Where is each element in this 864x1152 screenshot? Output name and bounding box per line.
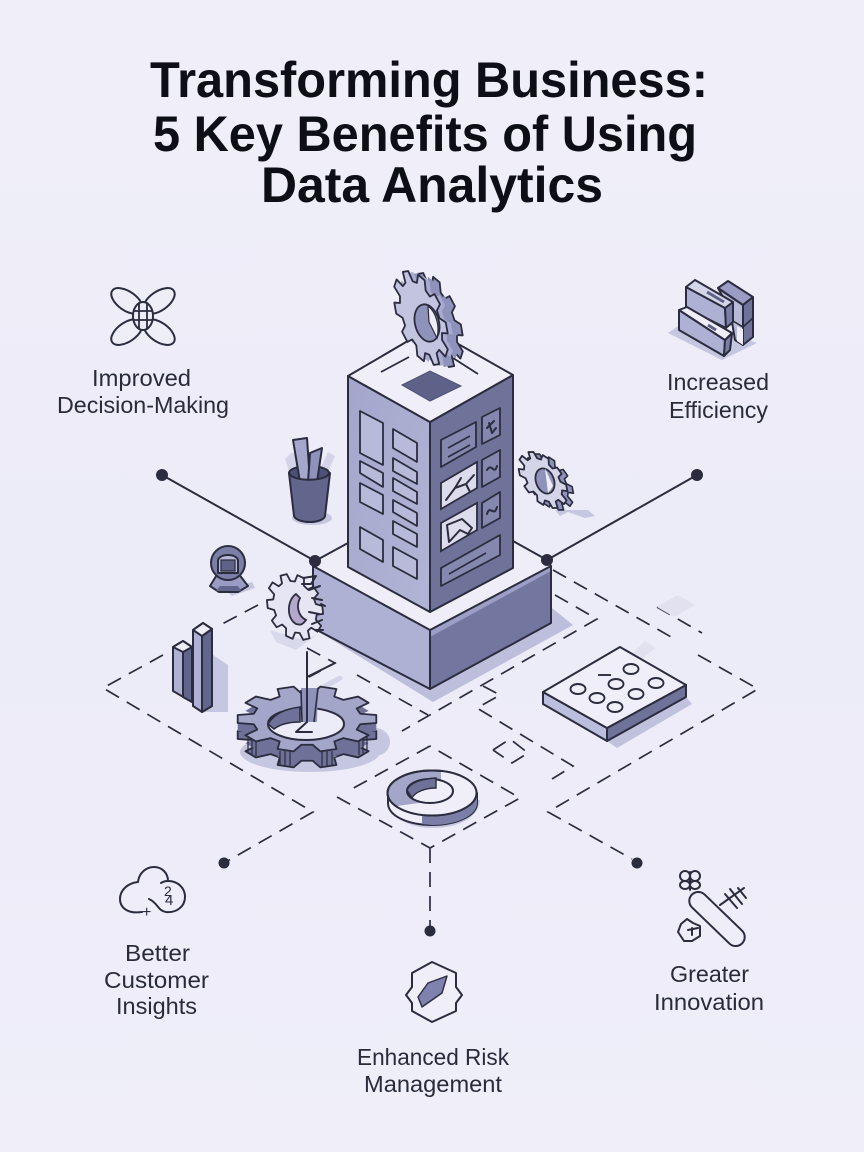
plinth	[313, 497, 551, 689]
icon: improved decision-making	[107, 283, 179, 350]
label: enhanced risk management: Management	[364, 1071, 503, 1097]
dashed connector network	[103, 570, 758, 930]
central tower on plinth	[313, 328, 573, 702]
label: improved decision-making: Decision-Making	[57, 392, 229, 418]
icon: better customer insights	[120, 867, 185, 921]
label: better customer insights: Better	[125, 940, 190, 966]
bar chart	[173, 623, 228, 712]
label: enhanced risk management	[357, 1044, 509, 1097]
tower left windows	[360, 411, 417, 579]
label: improved decision-making	[57, 365, 229, 418]
gear on top of tower	[387, 263, 470, 375]
icon: enhanced risk management	[406, 962, 462, 1022]
plinth corner dots	[309, 554, 553, 567]
flag on ground gear	[307, 652, 340, 713]
icon: greater innovation	[678, 871, 748, 950]
label: greater innovation: Innovation	[654, 989, 764, 1015]
label: improved decision-making: Improved	[92, 365, 191, 391]
webcam icon	[210, 546, 255, 596]
ring on ground	[388, 770, 480, 828]
floating gear right of tower	[514, 446, 595, 518]
title: Transforming Business:	[150, 52, 708, 108]
tower faces	[348, 328, 513, 612]
label: greater innovation: Greater	[670, 961, 749, 987]
label: increased efficiency	[667, 369, 769, 423]
label: greater innovation	[654, 961, 764, 1015]
solid connector lines with end dots	[156, 469, 703, 936]
label: better customer insights: Insights	[116, 993, 197, 1019]
pen cup	[285, 438, 335, 525]
label: increased efficiency: Increased	[667, 369, 769, 395]
icon: better customer insights: +	[142, 904, 151, 921]
tower right dashboard panels	[441, 408, 500, 586]
large ground gear	[238, 687, 390, 772]
label: enhanced risk management: Enhanced Risk	[357, 1044, 509, 1070]
title: 5 Key Benefits of Using	[153, 106, 697, 162]
broken gear beside plinth	[264, 572, 326, 650]
title: Data Analytics	[261, 157, 603, 213]
label: increased efficiency: Efficiency	[669, 397, 768, 423]
label: better customer insights: Customer	[104, 967, 209, 993]
icon: increased efficiency	[668, 280, 757, 360]
title	[150, 52, 708, 213]
icon: better customer insights: 2	[164, 883, 172, 899]
plinth shadow	[313, 608, 573, 702]
icon: better customer insights: 4	[165, 892, 173, 909]
label: better customer insights	[104, 940, 209, 1019]
calendar board	[543, 641, 692, 748]
